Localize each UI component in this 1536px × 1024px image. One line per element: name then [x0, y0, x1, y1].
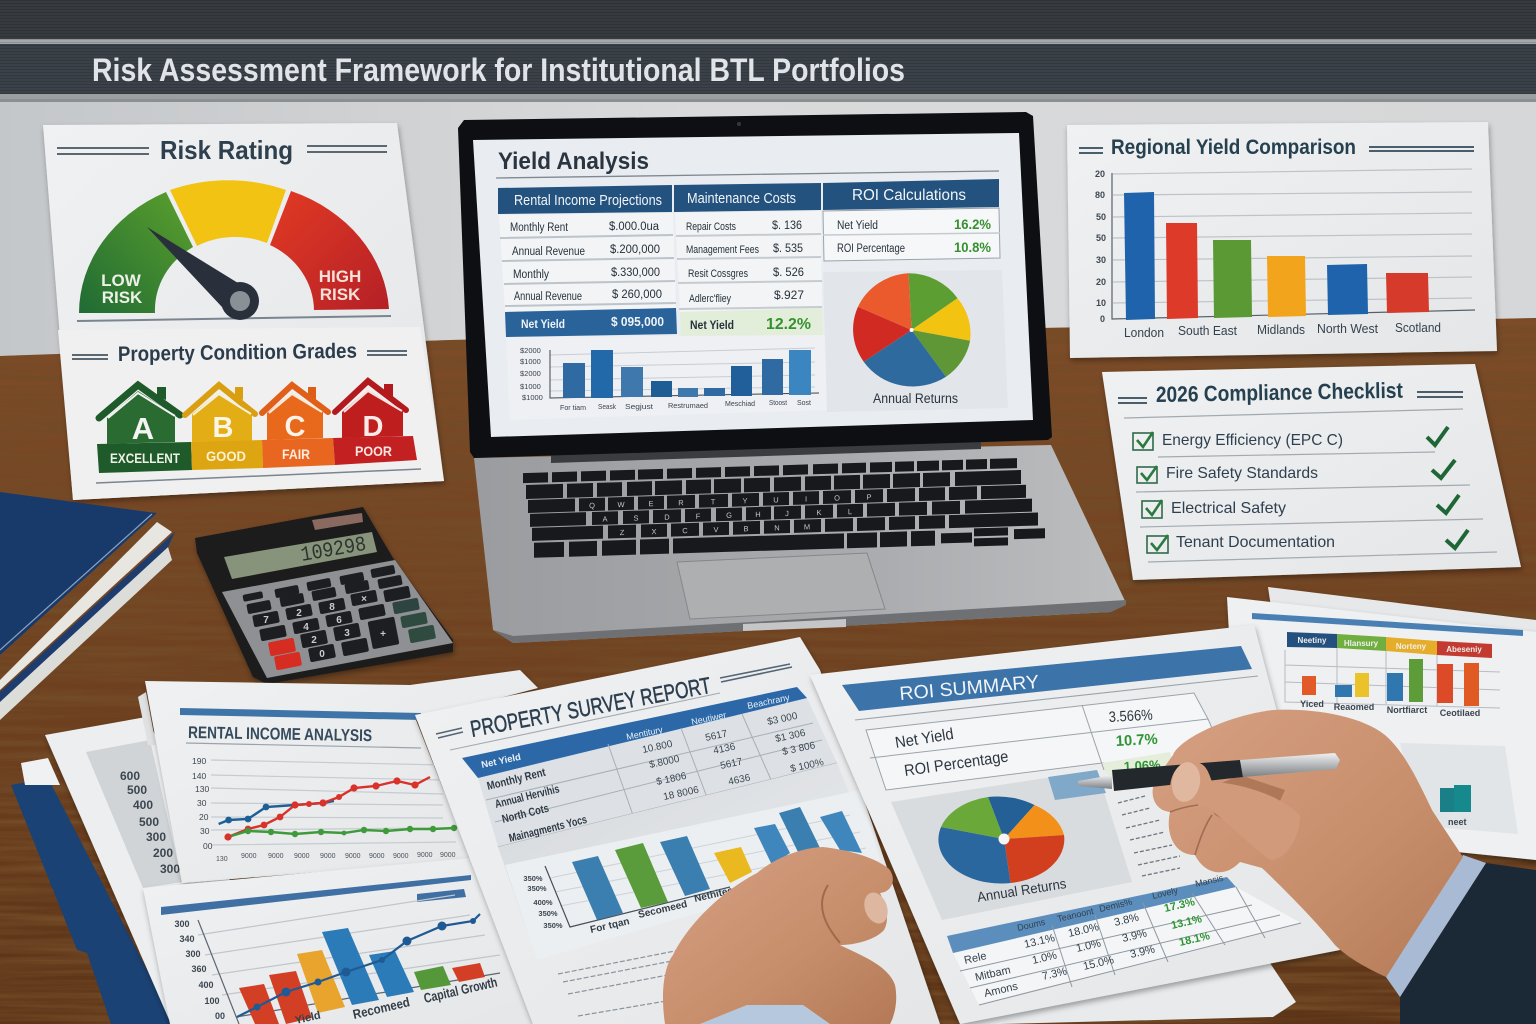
- keyboard letters: A: [602, 515, 608, 524]
- combo chart: capital growth: 340: [179, 934, 195, 944]
- mini bar chart with coloured header: Ceotilaed: [1440, 708, 1480, 718]
- table: roi summary: ROI Percentage: [903, 749, 1010, 780]
- needle: [147, 227, 259, 320]
- grade C house: C: [285, 411, 306, 443]
- keyboard letters: S: [633, 514, 639, 523]
- title: Risk Assessment Framework for Institutional BTL Portfolios: [92, 52, 905, 88]
- bar chart: survey: Nethitec: [693, 885, 735, 905]
- keyboard letters: B: [743, 524, 749, 533]
- keyboard letters: V: [713, 525, 719, 534]
- navy folder: [11, 778, 175, 1024]
- keyboard letters: T: [711, 497, 716, 506]
- mini bar chart with coloured header: Hlansury: [1344, 639, 1379, 648]
- back paper stack: left: 600: [120, 769, 140, 783]
- line chart: rental income: 9000: [417, 852, 433, 859]
- table: maintenance costs: Net Yield: [690, 318, 734, 332]
- checklist item: fire safety: [1137, 460, 1455, 483]
- mini bar chart with coloured header: Nortfiarct: [1387, 705, 1427, 715]
- calculator display: 109298: [299, 534, 368, 568]
- calculator key glyphs: 0: [319, 649, 325, 660]
- calculator key glyphs: 3: [344, 628, 350, 639]
- keyboard letters: W: [617, 500, 625, 509]
- keyboard letters: I: [805, 494, 807, 504]
- table: roi bottom: 18.1%: [1178, 930, 1211, 949]
- combo chart: capital growth: [174, 895, 500, 1024]
- panel: capital growth report: [143, 858, 560, 1024]
- table: roi bottom: 3.9%: [1121, 928, 1148, 945]
- table: maintenance costs: Repair Costs: [686, 221, 736, 233]
- table: survey: $ 1806: [655, 771, 688, 788]
- combo chart: capital growth: 300: [174, 919, 190, 929]
- table: maintenance costs: Adlerc'fliey: [689, 293, 731, 305]
- bar chart: survey: 350%: [527, 884, 547, 893]
- table: roi bottom: 18.0%: [1067, 921, 1100, 940]
- table: roi summary: [866, 693, 1228, 790]
- keyboard: [523, 457, 1045, 560]
- teal mini chart: [1400, 743, 1518, 834]
- line chart: rental income: 30: [200, 826, 210, 836]
- line chart: rental income: 9000: [345, 853, 361, 860]
- table: roi bottom: Teanoont: [1056, 906, 1095, 924]
- back sheets: right: [1227, 587, 1536, 860]
- calculator key glyphs: 4: [303, 622, 309, 633]
- grade A house: A: [132, 411, 154, 446]
- table: rental income projections: Net Yield: [521, 317, 565, 331]
- calculator display: [224, 532, 377, 579]
- calculator: [195, 507, 453, 684]
- checklist item: electrical safety: Electrical Safety: [1171, 500, 1286, 517]
- thumb: [1170, 762, 1300, 860]
- table: roi bottom: Doums: [1016, 917, 1047, 933]
- bar chart: regional: North West: [1317, 322, 1379, 336]
- keyboard letters: P: [866, 493, 872, 502]
- grade A house: [97, 385, 192, 473]
- calculator key glyphs: 6: [336, 615, 342, 626]
- keyboard letters: J: [785, 509, 789, 518]
- keyboard letters: F: [696, 512, 701, 521]
- bar chart: regional: London: [1124, 326, 1164, 340]
- shirt cuff: left: [700, 1005, 830, 1024]
- keyboard letters: C: [682, 526, 688, 535]
- gauge: [77, 180, 391, 321]
- table: survey: 5617: [704, 728, 729, 744]
- line chart: rental income: 140: [192, 771, 206, 781]
- table: rental income projections: [498, 185, 677, 337]
- grade C house: FAIR: [282, 446, 310, 462]
- table: survey: Net Yield: [480, 752, 522, 771]
- bar chart: regional: South East: [1178, 324, 1238, 338]
- table: roi summary: Net Yield: [894, 726, 955, 752]
- table: survey: $3 000: [766, 711, 799, 728]
- keyboard letters: M: [804, 522, 810, 532]
- keyboard letters: N: [774, 523, 780, 532]
- grade B house: B: [213, 412, 233, 444]
- calculator key glyphs: [263, 594, 386, 660]
- back paper stack: left: 400: [133, 798, 153, 812]
- keyboard letters: R: [678, 498, 684, 507]
- table: maintenance costs: Management Fees: [686, 244, 759, 256]
- back paper stack: left: 500: [139, 815, 159, 829]
- table: roi bottom: 17.3%: [1163, 896, 1196, 915]
- table: survey: 5617: [719, 756, 744, 772]
- line chart: rental income: 190: [192, 756, 206, 766]
- bar chart: screen: $2000: [520, 346, 541, 355]
- bar chart: regional: Scotland: [1395, 321, 1441, 335]
- table: rental income projections: $ 260,000: [612, 289, 662, 301]
- panel: property survey report: [415, 637, 940, 1024]
- table: survey: Mainagments Yocs: [508, 814, 588, 845]
- gauge: RISK: [320, 285, 361, 304]
- bar chart: screen: Segjust: [625, 402, 654, 411]
- table: rental income projections: Annual Revenue: [512, 246, 585, 258]
- heading: property survey report: PROPERTY SURVEY REPORT: [468, 672, 713, 742]
- suit sleeve: [1400, 863, 1536, 1024]
- bar chart: regional: 20: [1096, 277, 1106, 287]
- table: ROI calculations: 10.8%: [954, 239, 992, 255]
- keyboard letters: H: [755, 510, 761, 519]
- checklist item: tenant documentation: Tenant Documentation: [1176, 534, 1335, 551]
- checklist item: tenant documentation: [1147, 530, 1468, 553]
- table: rental income projections: Monthly: [513, 269, 549, 281]
- table: ROI calculations: 16.2%: [954, 216, 992, 232]
- line chart: rental income: 30: [197, 798, 207, 808]
- gauge: LOW: [101, 271, 142, 290]
- table: survey: $ 3 806: [781, 740, 817, 758]
- line chart: rental income: 9000: [294, 853, 310, 860]
- pie chart: annual returns: Annual Returns: [873, 391, 958, 406]
- keyboard letters: L: [848, 507, 852, 516]
- bar chart: screen: $1000: [520, 382, 541, 391]
- grade D house: [333, 381, 417, 465]
- back paper stack: left: 300: [146, 830, 166, 844]
- grade B house: GOOD: [206, 448, 246, 464]
- table: ROI calculations: ROI Percentage: [837, 243, 905, 255]
- bar chart: regional: 80: [1095, 190, 1105, 200]
- line chart: rental income: 9000: [241, 853, 257, 860]
- pie chart: annual returns: [823, 270, 1008, 412]
- table: roi bottom: Amons: [983, 980, 1020, 1000]
- table: survey: $.8000: [648, 754, 681, 771]
- teal mini chart: neet: [1448, 817, 1467, 827]
- panel: risk rating and condition grades: [43, 123, 444, 500]
- table: ROI calculations: ROI Calculations: [852, 187, 966, 204]
- table: survey: Neutiwer: [690, 710, 727, 727]
- bar chart: survey: Secomeed: [637, 899, 688, 921]
- mini bar chart with coloured header: Norteny: [1396, 642, 1427, 651]
- table: rental income projections: Annual Revenue: [514, 291, 582, 303]
- back paper stack: left: [21, 717, 300, 1024]
- screen: yield analysis: [473, 133, 1033, 437]
- calculator key glyphs: +: [380, 629, 386, 640]
- grade A house: EXCELLENT: [110, 450, 180, 466]
- gauge: RISK: [102, 288, 143, 307]
- table: rental income projections: Monthly Rent: [510, 222, 569, 234]
- back paper stack: left: 500: [127, 783, 147, 797]
- roi small text lines: [1118, 796, 1180, 876]
- table: roi summary: 3.566%: [1108, 707, 1153, 726]
- blue binder stack: [0, 492, 175, 720]
- table: roi bottom: Mansis: [1194, 873, 1225, 889]
- keyboard letters: X: [651, 527, 657, 536]
- combo chart: capital growth: 100: [204, 996, 220, 1006]
- grade B house: [185, 385, 263, 470]
- bar chart: screen: Seask: [598, 402, 616, 411]
- keyboard letters: G: [726, 511, 732, 520]
- calculator key glyphs: ×: [361, 594, 367, 605]
- bar chart: survey: 350%: [543, 921, 563, 930]
- bar chart: screen: Restrumaed: [668, 401, 708, 410]
- heading: compliance: [1118, 378, 1463, 418]
- table: roi bottom: [947, 873, 1301, 1005]
- bar chart: screen: Meschiad: [725, 399, 755, 408]
- screen heading: Yield Analysis: [498, 148, 649, 175]
- table: survey: Mentitury: [625, 724, 664, 742]
- line chart: rental income: 130: [216, 856, 228, 863]
- table: rental income projections: $.000.0ua: [609, 221, 660, 233]
- heading: rental income analysis: RENTAL INCOME ANALYSIS: [188, 723, 372, 745]
- heading: risk rating: [57, 135, 387, 165]
- calculator key glyphs: 8: [329, 602, 335, 613]
- pen: [1078, 753, 1340, 791]
- bar chart: screen: $2000: [520, 369, 541, 378]
- line chart: rental income: 9000: [440, 852, 456, 859]
- heading: property condition grades: Property Condition Grades: [118, 340, 357, 366]
- table: maintenance costs: $. 526: [773, 265, 804, 279]
- table: roi summary: 1.06%: [1123, 757, 1161, 774]
- bar chart: regional: 50: [1096, 233, 1106, 243]
- right hand with pen: [1078, 710, 1536, 1024]
- table: maintenance costs: $.927: [774, 288, 804, 302]
- table: rental income projections: $.200,000: [610, 244, 660, 256]
- bar chart: regional: 0: [1100, 314, 1105, 324]
- line chart: rental income: 00: [203, 841, 213, 851]
- bar chart: screen: Sost: [797, 398, 812, 407]
- table: rental income projections: $ 095,000: [611, 314, 664, 329]
- shirt cuff: right: [1386, 855, 1486, 997]
- bar chart: survey: 350%: [538, 909, 558, 918]
- calculator key glyphs: 2: [296, 608, 302, 619]
- heading: regional yield: Regional Yield Comparison: [1111, 136, 1356, 159]
- table: survey: 18 8006: [662, 785, 700, 803]
- back paper stack: left: 300: [160, 862, 180, 876]
- mini bar chart with coloured header: Yiced: [1300, 699, 1324, 709]
- bar chart: regional: 20: [1095, 169, 1105, 179]
- table: roi bottom: Lovely: [1151, 885, 1179, 901]
- wall background: [0, 0, 1536, 360]
- palm shadow: [1205, 775, 1285, 840]
- left hand: [663, 847, 896, 1024]
- table: maintenance costs: Resit Cossgres: [688, 268, 748, 280]
- table: survey: Monthly Rent: [486, 767, 547, 793]
- bar chart: survey: 400%: [533, 898, 553, 907]
- keyboard letters: Z: [620, 528, 625, 537]
- table: roi bottom: 1.0%: [1075, 938, 1102, 955]
- table: roi bottom: Mitbam: [974, 964, 1012, 984]
- table: roi bottom: 13.1%: [1170, 913, 1203, 932]
- mini bar chart with coloured header: Reaomed: [1334, 702, 1374, 712]
- checklist item: energy efficiency: Energy Efficiency (EPC C): [1162, 432, 1343, 449]
- table: ROI calculations: [823, 179, 1000, 261]
- calculator key glyphs: 2: [311, 635, 317, 646]
- line chart: rental income: 20: [199, 812, 209, 822]
- gauge: HIGH: [319, 267, 361, 286]
- table: roi bottom: 3.8%: [1113, 912, 1140, 929]
- heading: regional yield: [1079, 136, 1474, 159]
- bar chart: screen: $1000: [520, 357, 541, 366]
- bar chart: screen: $1000: [522, 393, 543, 402]
- screen heading: [496, 148, 999, 178]
- table: roi bottom: Rele: [963, 950, 988, 967]
- heading: risk rating: Risk Rating: [160, 135, 293, 165]
- table: maintenance costs: $. 136: [772, 218, 802, 232]
- combo chart: capital growth: 400: [198, 980, 214, 990]
- laptop screen bezel: [458, 112, 1052, 458]
- keyboard letters: D: [664, 513, 670, 522]
- table: survey: 10.800: [641, 739, 674, 756]
- table: survey: 4636: [727, 772, 752, 788]
- bar chart: regional: Midlands: [1257, 323, 1305, 337]
- table: survey: North Cots: [501, 803, 550, 826]
- grade D house: POOR: [355, 443, 392, 459]
- table: survey: Beachrany: [746, 692, 791, 711]
- checklist item: electrical safety: [1142, 495, 1459, 518]
- panel: 2026 compliance checklist: [1102, 364, 1521, 580]
- table: roi bottom: 15.0%: [1082, 954, 1115, 973]
- line chart: rental income: 9000: [268, 853, 284, 860]
- pie chart: annual returns: [891, 770, 1132, 920]
- table: survey: 4136: [712, 741, 737, 757]
- keyboard letters: Y: [742, 496, 748, 505]
- combo chart: capital growth: Recomeed: [351, 994, 411, 1022]
- roi summary header: ROI SUMMARY: [899, 672, 1040, 705]
- mini bar chart with coloured header: Abeseniy: [1446, 645, 1482, 654]
- panel: rental income analysis: [138, 670, 538, 883]
- calculator keys: [242, 565, 436, 670]
- roi summary header: [842, 646, 1252, 711]
- keyboard letters: O: [834, 493, 840, 503]
- table: roi summary: 10.7%: [1115, 731, 1158, 750]
- bar chart: screen: [506, 335, 828, 420]
- checklist item: energy efficiency: [1133, 427, 1448, 450]
- keyboard letters: K: [816, 508, 822, 517]
- mini bar chart with coloured header: [1285, 632, 1500, 718]
- bar chart: screen: Stoost: [769, 398, 788, 407]
- thumbnail: [1169, 760, 1203, 804]
- line chart: rental income: 9000: [369, 853, 385, 860]
- table: rental income projections: Rental Income Projections: [514, 192, 662, 209]
- line chart: rental income: 130: [195, 784, 209, 794]
- bar chart: regional: 30: [1096, 255, 1106, 265]
- combo chart: capital growth: 360: [191, 964, 207, 974]
- bar chart: regional: [1095, 169, 1475, 340]
- combo chart: capital growth: Capital Growth: [422, 974, 499, 1006]
- line chart: rental income: [192, 756, 457, 863]
- bar chart: survey: For tqan: [589, 916, 631, 936]
- table: roi bottom: 3.9%: [1129, 944, 1156, 961]
- bar chart: screen: For tiam: [560, 403, 586, 412]
- combo chart: capital growth: 00: [215, 1011, 225, 1021]
- grade D house: D: [363, 411, 383, 443]
- table: rental income projections: $.330,000: [611, 267, 660, 279]
- table: ROI calculations: Net Yield: [837, 220, 878, 232]
- pie chart: annual returns: Annual Returns: [976, 875, 1067, 905]
- table: survey: $1 306: [774, 728, 807, 745]
- table: survey: [462, 687, 837, 847]
- table: survey: $ 100%: [789, 757, 825, 775]
- calculator key glyphs: 7: [263, 615, 269, 626]
- grade C house: [262, 385, 335, 468]
- keyboard letters: Q: [589, 501, 595, 510]
- line chart: rental income: 9000: [393, 853, 409, 860]
- keyboard letters: [589, 493, 872, 538]
- table: maintenance costs: 12.2%: [766, 316, 811, 333]
- table: roi bottom: 7.3%: [1041, 966, 1068, 983]
- table: maintenance costs: [674, 183, 823, 338]
- bar chart: regional: 10: [1096, 298, 1106, 308]
- table: maintenance costs: $. 535: [773, 241, 803, 255]
- back paper stack: left: 200: [153, 846, 173, 860]
- laptop: [458, 112, 1126, 643]
- heading: compliance: 2026 Compliance Checklist: [1156, 378, 1404, 407]
- bar chart: survey: 350%: [523, 874, 543, 883]
- combo chart: capital growth: 300: [185, 949, 201, 959]
- checklist item: fire safety: Fire Safety Standards: [1166, 465, 1318, 482]
- survey body text lines: [558, 950, 680, 1016]
- table: roi bottom: 13.1%: [1023, 932, 1056, 951]
- laptop base: [474, 442, 1126, 643]
- keyboard letters: U: [773, 495, 779, 504]
- keyboard letters: E: [648, 499, 654, 508]
- table: maintenance costs: Maintenance Costs: [687, 190, 796, 207]
- line chart: rental income: 9000: [320, 853, 336, 860]
- mini bar chart with coloured header: Neetiny: [1298, 636, 1327, 645]
- bar chart: survey: [498, 763, 880, 960]
- table: roi bottom: Demis%: [1098, 897, 1133, 914]
- bar chart: regional: 50: [1096, 212, 1106, 222]
- wooden desk: [0, 318, 1536, 1024]
- left thumbnail: [860, 889, 892, 927]
- title banner: [0, 0, 1536, 102]
- table: roi bottom: 1.0%: [1031, 950, 1058, 967]
- panel: roi summary: [810, 625, 1340, 1024]
- table: survey: Annual Hervihis: [494, 783, 561, 811]
- panel: regional yield comparison: [1067, 122, 1497, 358]
